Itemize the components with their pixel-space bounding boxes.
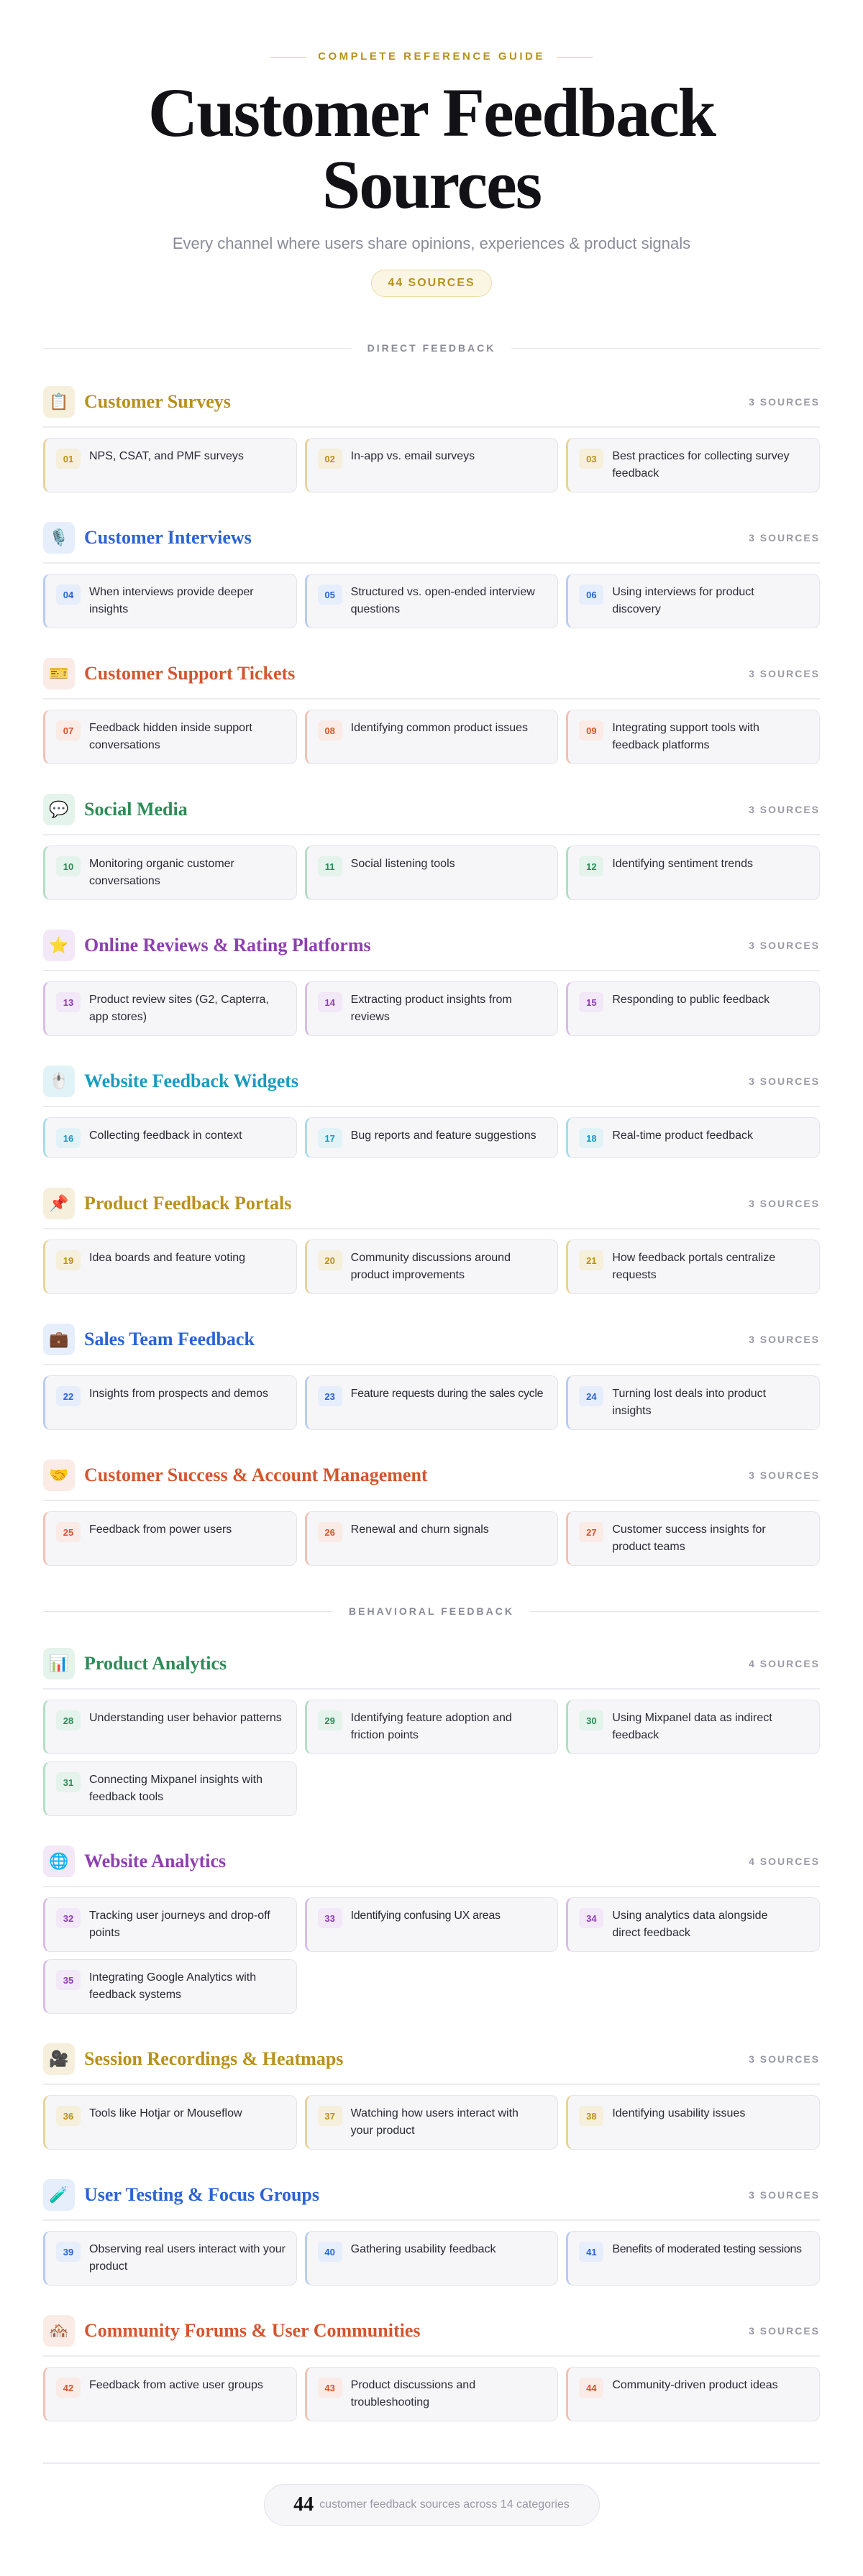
section header: Website Feedback Widgets bbox=[84, 1071, 298, 1091]
header bbox=[148, 50, 716, 297]
cards: 15 bbox=[586, 996, 597, 1008]
section header: 🤝 bbox=[49, 1466, 69, 1484]
cards: 18 bbox=[586, 1133, 597, 1143]
divider: behavioral feedback: BEHAVIORAL FEEDBACK bbox=[349, 1605, 514, 1617]
badge: 44 sources bbox=[371, 270, 492, 297]
section header: 🖱️ bbox=[49, 1072, 69, 1090]
cards: 39 bbox=[63, 2246, 73, 2258]
cards bbox=[43, 1375, 820, 1430]
cards: Responding to public feedback bbox=[612, 994, 770, 1006]
cards: 25 bbox=[63, 1527, 73, 1537]
cards: Community-driven product ideas bbox=[612, 2379, 778, 2391]
footer summary pill: 44 bbox=[293, 2493, 314, 2516]
section header: 🎙️ bbox=[49, 528, 69, 546]
section header: 3 SOURCES bbox=[749, 804, 820, 815]
section header: 3 SOURCES bbox=[749, 2189, 820, 2201]
cards: 20 bbox=[324, 1255, 335, 1265]
cards bbox=[43, 1117, 820, 1158]
cards: Understanding user behavior patterns bbox=[89, 1712, 282, 1724]
section header: 📊 bbox=[49, 1654, 69, 1672]
cards: discovery bbox=[612, 603, 661, 615]
panel: customer success bbox=[43, 1459, 820, 1566]
cards: insights bbox=[612, 1405, 652, 1417]
section header: 4 SOURCES bbox=[749, 1658, 820, 1669]
section header: 🌐 bbox=[49, 1852, 69, 1870]
cards: product teams bbox=[612, 1541, 685, 1553]
cards: 13 bbox=[63, 996, 73, 1008]
section header bbox=[43, 1648, 820, 1690]
section header: User Testing & Focus Groups bbox=[84, 2184, 319, 2205]
title: Customer Feedback bbox=[148, 74, 715, 151]
cards bbox=[43, 1511, 820, 1566]
panel: session recordings bbox=[43, 2043, 820, 2150]
section header: Product Feedback Portals bbox=[84, 1193, 291, 1214]
cards: 09 bbox=[586, 725, 597, 736]
cards bbox=[43, 2231, 820, 2286]
cards: Product review sites (G2, Capterra, app stores) bbox=[89, 994, 269, 1023]
section header: 📋 bbox=[49, 393, 69, 411]
section header: 📌 bbox=[49, 1194, 69, 1212]
cards: Watching how users interact with bbox=[351, 2107, 519, 2119]
panel: customer interviews bbox=[43, 522, 820, 628]
cards: 19 bbox=[63, 1255, 73, 1265]
cards: Social listening tools bbox=[351, 858, 455, 870]
cards: 41 bbox=[586, 2246, 597, 2258]
cards: 40 bbox=[324, 2246, 335, 2258]
section header bbox=[43, 1188, 820, 1229]
section header: Customer Surveys bbox=[84, 391, 231, 412]
section header: Online Reviews & Rating Platforms bbox=[84, 935, 371, 955]
section header: 🎫 bbox=[49, 664, 69, 682]
cards: Collecting feedback in context bbox=[89, 1129, 242, 1142]
section header bbox=[43, 522, 820, 564]
section header: 3 SOURCES bbox=[749, 396, 820, 408]
cards: 22 bbox=[63, 1390, 73, 1402]
cards bbox=[43, 2367, 820, 2421]
cards: Turning lost deals into product bbox=[612, 1388, 766, 1400]
cards: Identifying confusing UX areas bbox=[351, 1910, 501, 1922]
panel: customer surveys bbox=[43, 386, 820, 492]
cards: Integrating support tools with feedback platforms bbox=[612, 722, 759, 751]
section header: 3 SOURCES bbox=[749, 1076, 820, 1087]
section header: Customer Interviews bbox=[84, 527, 252, 548]
cards: Feedback hidden inside support conversations bbox=[89, 722, 252, 751]
cards: 43 bbox=[324, 2383, 335, 2393]
panel: customer support tickets bbox=[43, 658, 820, 764]
section header bbox=[43, 930, 820, 971]
cards: 32 bbox=[63, 1912, 73, 1924]
divider: direct feedback: DIRECT FEEDBACK bbox=[367, 342, 496, 354]
cards bbox=[43, 1897, 820, 2014]
cards: Customer success insights for bbox=[612, 1523, 766, 1536]
cards: Structured vs. open-ended interview questions bbox=[351, 586, 535, 615]
cards: 31 bbox=[63, 1777, 73, 1787]
cards: Identifying sentiment trends bbox=[612, 858, 753, 870]
section header: 3 SOURCES bbox=[749, 668, 820, 679]
cards: Using Mixpanel data as indirect feedback bbox=[612, 1712, 772, 1741]
cards bbox=[43, 1700, 820, 1816]
cards: When interviews provide deeper insights bbox=[89, 586, 254, 615]
badge: 44 sources: 44 SOURCES bbox=[388, 277, 475, 289]
cards: Bug reports and feature suggestions bbox=[351, 1129, 536, 1142]
subtitle: Every channel where users share opinions, experiences & product signals bbox=[173, 234, 690, 252]
cards: Product discussions and troubleshooting bbox=[351, 2379, 475, 2408]
cards: Feedback from power users bbox=[89, 1523, 232, 1536]
cards: 29 bbox=[324, 1715, 335, 1725]
cards: 02 bbox=[324, 453, 335, 464]
title bbox=[148, 74, 716, 223]
section header: ⭐ bbox=[49, 936, 69, 954]
cards: Identifying usability issues bbox=[612, 2107, 745, 2119]
cards: Monitoring organic customer conversations bbox=[89, 858, 234, 887]
section header: 3 SOURCES bbox=[749, 2325, 820, 2337]
cards: 07 bbox=[63, 725, 73, 736]
cards: Feature requests during the sales cycle bbox=[351, 1388, 543, 1400]
cards: 08 bbox=[324, 725, 335, 736]
cards: 03 bbox=[586, 453, 597, 464]
cards: Feedback from active user groups bbox=[89, 2379, 263, 2391]
cards: 21 bbox=[586, 1255, 597, 1265]
cards: Extracting product insights from reviews bbox=[351, 994, 512, 1023]
section header bbox=[43, 1324, 820, 1365]
section header: 🧪 bbox=[49, 2186, 69, 2204]
footer bbox=[43, 2462, 820, 2526]
section header: 🏘️ bbox=[49, 2321, 69, 2339]
cards: 33 bbox=[324, 1912, 335, 1924]
cards: How feedback portals centralize requests bbox=[612, 1252, 775, 1281]
panel: community forums bbox=[43, 2315, 820, 2421]
section header bbox=[43, 386, 820, 428]
section header: Customer Success & Account Management bbox=[84, 1465, 428, 1485]
cards bbox=[43, 710, 820, 764]
panel: sales team feedback bbox=[43, 1324, 820, 1430]
cards: 11 bbox=[325, 861, 335, 871]
cards: NPS, CSAT, and PMF surveys bbox=[89, 450, 244, 462]
panel: online reviews bbox=[43, 930, 820, 1036]
cards: 06 bbox=[586, 590, 597, 600]
section header: 3 SOURCES bbox=[749, 532, 820, 544]
cards: Using analytics data alongside bbox=[612, 1910, 767, 1922]
footer summary pill: customer feedback sources across 14 categories bbox=[319, 2498, 570, 2511]
cards: Using interviews for product bbox=[612, 586, 754, 598]
section header: Community Forums & User Communities bbox=[84, 2320, 420, 2341]
section header: Sales Team Feedback bbox=[84, 1329, 255, 1349]
section header bbox=[43, 1065, 820, 1107]
tagline: COMPLETE REFERENCE GUIDE bbox=[318, 50, 545, 63]
cards: Identifying common product issues bbox=[351, 722, 528, 734]
cards: Renewal and churn signals bbox=[351, 1523, 489, 1536]
cards bbox=[43, 981, 820, 1036]
cards: In-app vs. email surveys bbox=[351, 450, 475, 462]
cards bbox=[43, 845, 820, 900]
section header bbox=[43, 658, 820, 700]
cards: Benefits of moderated testing sessions bbox=[612, 2243, 802, 2255]
cards bbox=[43, 574, 820, 628]
cards: 30 bbox=[586, 1715, 597, 1725]
cards: 28 bbox=[63, 1715, 73, 1725]
section header bbox=[43, 2179, 820, 2221]
cards: Real-time product feedback bbox=[612, 1129, 753, 1142]
cards: 26 bbox=[324, 1527, 335, 1537]
cards: Community discussions around product improvements bbox=[351, 1252, 511, 1281]
cards: Idea boards and feature voting bbox=[89, 1252, 245, 1264]
section header: 3 SOURCES bbox=[749, 2053, 820, 2065]
footer summary pill bbox=[263, 2484, 600, 2526]
panel: social media bbox=[43, 794, 820, 900]
cards: Identifying feature adoption and friction points bbox=[351, 1712, 512, 1741]
panel: product feedback portals bbox=[43, 1188, 820, 1294]
section header: 3 SOURCES bbox=[749, 1470, 820, 1481]
section header: 🎥 bbox=[49, 2050, 69, 2068]
cards: 14 bbox=[324, 996, 335, 1008]
cards: 35 bbox=[63, 1974, 73, 1986]
section header: Product Analytics bbox=[84, 1653, 227, 1674]
cards: 27 bbox=[586, 1527, 597, 1537]
section header: 4 SOURCES bbox=[749, 1856, 820, 1867]
cards bbox=[43, 2095, 820, 2150]
cards: direct feedback bbox=[612, 1927, 690, 1939]
cards: Observing real users interact with your product bbox=[89, 2243, 286, 2273]
section header: 3 SOURCES bbox=[749, 1334, 820, 1345]
section header bbox=[43, 1459, 820, 1501]
panel: user testing bbox=[43, 2179, 820, 2286]
section header: Session Recordings & Heatmaps bbox=[84, 2048, 343, 2069]
cards: 42 bbox=[63, 2383, 73, 2393]
cards: Tools like Hotjar or Mouseflow bbox=[89, 2107, 242, 2119]
section header: Social Media bbox=[84, 799, 188, 820]
cards: 16 bbox=[63, 1133, 73, 1143]
section header bbox=[43, 1846, 820, 1887]
cards: 17 bbox=[324, 1133, 335, 1143]
cards: 38 bbox=[586, 2111, 597, 2121]
cards: 05 bbox=[324, 590, 335, 600]
cards: 36 bbox=[63, 2111, 73, 2121]
cards: Best practices for collecting survey feedback bbox=[612, 450, 790, 480]
section header: Website Analytics bbox=[84, 1851, 226, 1871]
panel: product analytics bbox=[43, 1648, 820, 1816]
cards: Insights from prospects and demos bbox=[89, 1388, 268, 1400]
cards: Integrating Google Analytics with feedback systems bbox=[89, 1971, 256, 2001]
section header: 💬 bbox=[49, 800, 69, 818]
cards bbox=[43, 1239, 820, 1294]
cards: your product bbox=[351, 2124, 415, 2137]
section header: 3 SOURCES bbox=[749, 940, 820, 951]
section header: Customer Support Tickets bbox=[84, 663, 295, 684]
cards: 10 bbox=[63, 861, 73, 871]
cards: Tracking user journeys and drop-off points bbox=[89, 1910, 270, 1939]
cards: 44 bbox=[586, 2383, 597, 2393]
cards: 01 bbox=[63, 453, 73, 464]
section header: 3 SOURCES bbox=[749, 1198, 820, 1209]
cards: 04 bbox=[63, 590, 73, 600]
cards: Gathering usability feedback bbox=[351, 2243, 496, 2255]
cards: 24 bbox=[586, 1390, 597, 1402]
title: Sources bbox=[322, 146, 541, 223]
cards: 34 bbox=[586, 1912, 597, 1924]
cards: Connecting Mixpanel insights with feedback tools bbox=[89, 1774, 262, 1803]
section header bbox=[43, 2043, 820, 2085]
cards: 37 bbox=[324, 2111, 335, 2121]
panel: website analytics bbox=[43, 1846, 820, 2014]
section header: 💼 bbox=[49, 1330, 69, 1348]
section header bbox=[43, 2315, 820, 2357]
cards bbox=[43, 438, 820, 492]
cards: 23 bbox=[324, 1390, 335, 1402]
cards: 12 bbox=[586, 861, 597, 871]
section header bbox=[43, 794, 820, 835]
panel: website feedback widgets bbox=[43, 1065, 820, 1158]
